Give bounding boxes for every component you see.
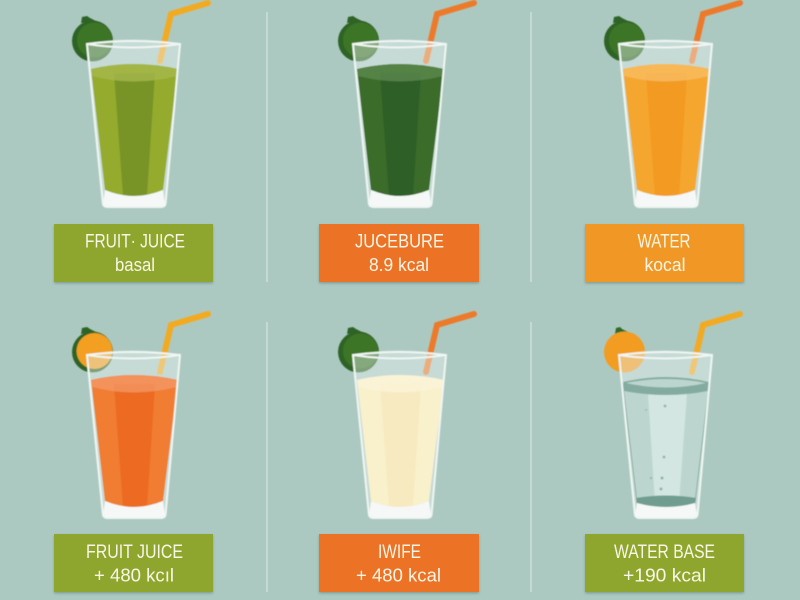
icon: lime garnish — [604, 16, 645, 62]
label: fruit juice basal — [54, 224, 213, 282]
label: water base +190 kcal — [585, 534, 744, 592]
glass base — [103, 501, 165, 518]
glass body — [618, 40, 713, 208]
icon: straw — [160, 3, 208, 61]
label: jucebure 8.9 kcal — [319, 224, 479, 282]
glass outline — [353, 41, 446, 207]
icon: lime garnish — [338, 16, 379, 62]
icon: lime garnish — [338, 327, 379, 372]
label: water kcal — [585, 224, 744, 282]
glass outline — [353, 352, 446, 518]
glass outline — [619, 352, 712, 518]
glass body — [86, 40, 181, 208]
label: water base +190 kcal: +190 kcal — [623, 566, 706, 586]
liquid — [623, 64, 710, 196]
liquid — [91, 64, 178, 196]
label: iwife +480 kcal: + 480 kcal — [356, 566, 441, 586]
glass outline — [87, 352, 180, 518]
glass base — [635, 190, 697, 207]
label: jucebure 8.9 kcal: JUCEBURE — [355, 232, 444, 252]
glass: green fruit juice — [72, 3, 208, 208]
glass: water — [604, 314, 740, 519]
glass body — [352, 350, 447, 519]
label: water kcal: kocal — [644, 255, 686, 275]
glass body — [352, 40, 447, 208]
glass outline — [619, 41, 712, 207]
icon: straw — [426, 314, 474, 372]
glass base — [103, 190, 165, 207]
glass base — [369, 190, 431, 207]
label: jucebure 8.9 kcal: 8.9 kcal — [369, 255, 429, 275]
liquid — [357, 375, 444, 507]
label: water kcal: WATER — [638, 232, 690, 252]
label: water base +190 kcal: WATER BASE — [614, 542, 715, 563]
glass: dark green juice — [338, 3, 474, 208]
glass body — [618, 350, 713, 519]
icon: straw — [692, 314, 740, 372]
icon: orange garnish — [604, 327, 645, 372]
glass base — [369, 501, 431, 518]
glass: orange drink — [604, 3, 740, 208]
icon: straw — [160, 314, 208, 372]
liquid — [357, 64, 444, 196]
glass outline — [87, 41, 180, 207]
water — [623, 377, 709, 507]
icon: orange garnish — [72, 327, 113, 372]
icon: lime garnish — [72, 16, 113, 62]
label: fruit juice +480 kcal — [54, 534, 213, 592]
label: iwife +480 kcal: IWIFE — [378, 542, 421, 563]
label: fruit juice +480 kcal: FRUIT JUICE — [86, 542, 183, 563]
label: fruit juice basal: basal — [115, 255, 155, 275]
liquid — [91, 375, 178, 507]
label: fruit juice +480 kcal: + 480 kcıl — [94, 566, 174, 586]
glass body — [86, 350, 181, 519]
glass base — [635, 503, 697, 518]
label: fruit juice basal: FRUIT· JUICE — [85, 232, 185, 252]
icon: straw — [692, 3, 740, 61]
glass: creamy drink — [338, 314, 474, 519]
icon: straw — [426, 3, 474, 61]
label: iwife +480 kcal — [319, 534, 479, 592]
glass: carrot orange juice — [72, 314, 208, 519]
